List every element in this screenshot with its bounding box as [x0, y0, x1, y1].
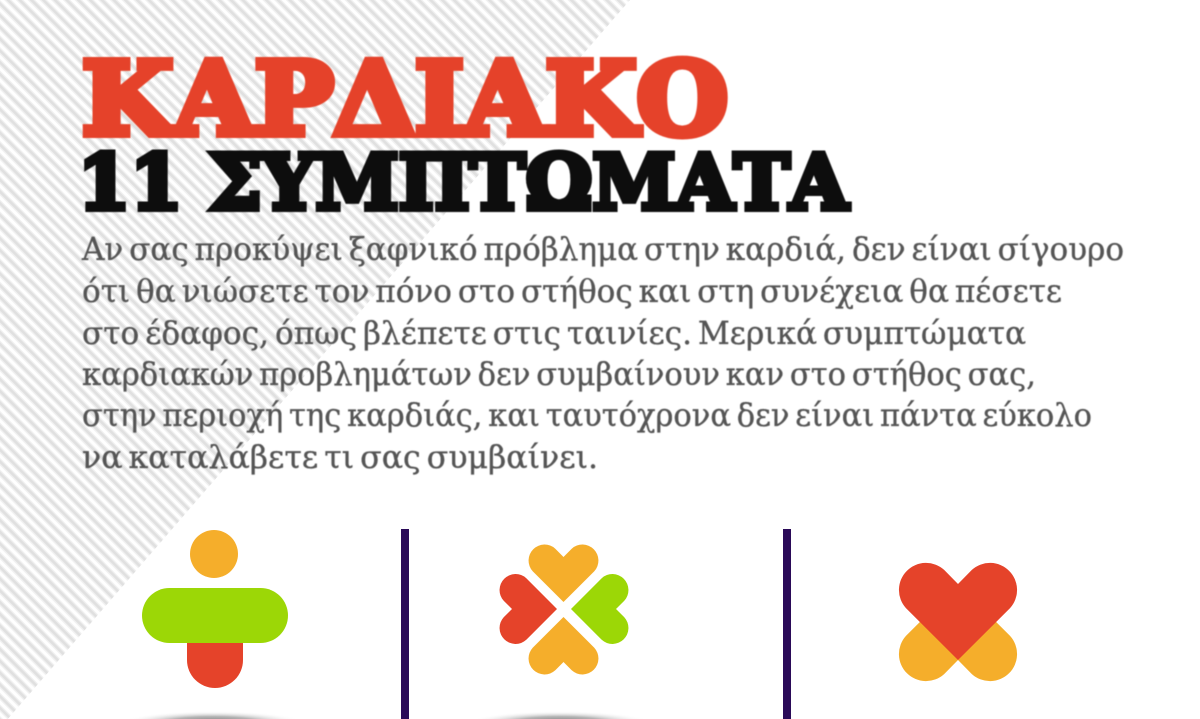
intro text block: ότι θα νιώσετε τον πόνο στο στήθος και στη συνέχεια θα πέσετε	[82, 274, 1062, 310]
icon: overlapping hearts	[899, 563, 1017, 681]
intro text block: στο έδαφος, όπως βλέπετε στις ταινίες. Μερικά συμπτώματα	[82, 316, 1026, 352]
title: red heading: ΚΑΡΔΙΑΚΟ	[82, 40, 728, 158]
intro text block: να καταλάβετε τι σας συμβαίνει.	[82, 440, 598, 476]
divider: left	[401, 529, 409, 719]
intro text block	[81, 232, 1124, 476]
intro text block: στην περιοχή της καρδιάς, και ταυτόχρονα δεν είναι πάντα εύκολο	[82, 398, 1092, 434]
icon: four heart clover	[500, 545, 628, 674]
divider: right	[783, 529, 791, 719]
striped background triangle	[0, 0, 630, 719]
intro text block: καρδιακών προβλημάτων δεν συμβαίνουν καν στο στήθος σας,	[82, 357, 1036, 393]
intro text block: Αν σας προκύψει ξαφνικό πρόβλημα στην καρδιά, δεν είναι σίγουρο	[81, 232, 1124, 268]
shadow: under person figure	[123, 711, 303, 719]
icon: person figure	[142, 530, 288, 688]
shadow: under clover	[470, 711, 650, 719]
title: black subheading: 11 ΣΥΜΠΤΩΜΑΤΑ	[78, 138, 849, 227]
